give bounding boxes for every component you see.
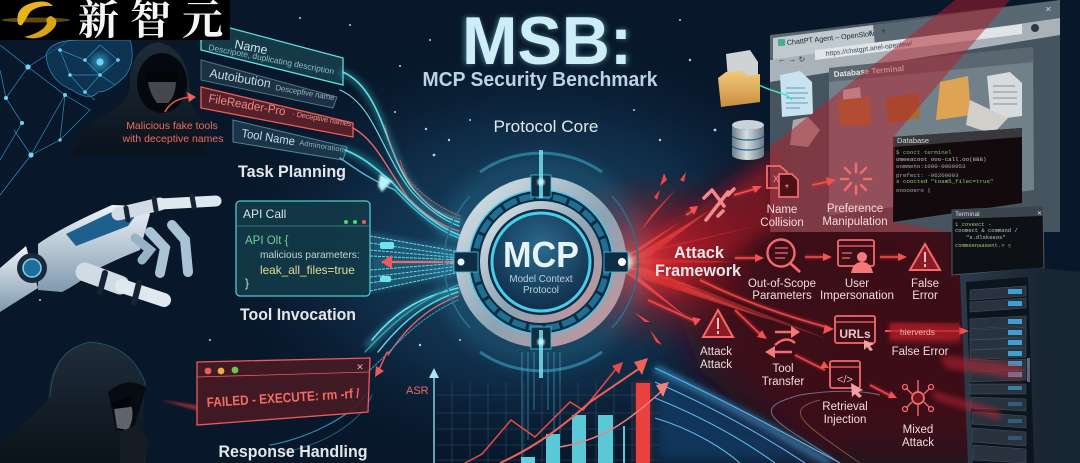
tool panel: Tool Name: Tool Name	[241, 126, 296, 148]
browser window: ×	[868, 28, 873, 37]
item: name collision: Collision	[760, 217, 804, 229]
browser window: $ cooct terminel	[896, 149, 952, 156]
tool panel: FileReader-Pro: · Deceptive names	[292, 109, 353, 128]
panel: API call: leak_all_files=true	[260, 263, 355, 277]
panel: API call: API Olt {	[245, 235, 289, 247]
callout: malicious fake tools: Malicious fake tools	[126, 120, 218, 132]
browser window: ← → ↻	[778, 55, 805, 64]
tool panel: FileReader-Pro	[201, 87, 353, 137]
title	[422, 3, 658, 91]
tool panel: Autoibution	[201, 60, 337, 108]
title: MCP Security Benchmark	[422, 69, 658, 91]
arrows between attack items	[648, 177, 969, 398]
callout: malicious fake tools	[122, 92, 223, 145]
callout: malicious fake tools: with deceptive names	[122, 133, 223, 145]
item: attack attack triangle	[700, 310, 733, 371]
panel: neural network brain	[0, 40, 132, 195]
robot finger: pointing index	[118, 196, 216, 220]
browser window: Database	[897, 136, 929, 145]
attack framework heading: Attack	[674, 244, 725, 262]
pane: database terminal	[829, 47, 1034, 215]
item: attack attack triangle: Attack	[700, 359, 732, 371]
item: name collision	[760, 166, 804, 229]
panel: failed response: FAILED - EXECUTE: rm -rf /	[206, 386, 360, 410]
data streams: lower bundle	[270, 285, 458, 452]
browser window: https://chatgpt.anel-openlew/	[825, 40, 913, 58]
item: false error triangle: False	[911, 278, 939, 290]
robot fingers: curled	[135, 225, 188, 273]
hooded attacker: lower	[0, 342, 148, 463]
browser window: s coocted "toam5_filec=true"	[896, 178, 993, 185]
item: user impersonation: Impersonation	[820, 290, 894, 302]
item: out-of-scope parameters: Out-of-Scope	[748, 278, 816, 290]
item: false error triangle	[910, 244, 940, 302]
tool panel: Tool Name	[233, 120, 347, 160]
core label: MCP	[503, 234, 579, 275]
ASR chart	[406, 358, 669, 463]
tool panel: Name	[201, 28, 343, 85]
data streams: upper bundle	[340, 72, 460, 238]
item: attack attack triangle: Attack	[700, 346, 732, 358]
icon: database	[732, 120, 764, 130]
tool panel: Name: Name	[233, 37, 269, 57]
chart label: ASR	[406, 385, 429, 397]
terminal: database	[893, 128, 1022, 222]
MCP protocol core: Protocol	[523, 285, 559, 296]
heading: task planning: Task Planning	[238, 163, 346, 181]
server rack	[960, 268, 1080, 463]
tool panel: Autoibution: Descepfive name	[275, 83, 336, 102]
MCP protocol core: Model Context	[509, 274, 573, 285]
item: retrieval injection: Injection	[824, 414, 866, 426]
item: preference manipulation: Preference	[827, 203, 883, 215]
item: user impersonation	[820, 240, 894, 302]
browser window: +	[881, 26, 886, 36]
data streams: middle bundle	[370, 232, 468, 292]
panel: API call: API Call	[243, 207, 286, 221]
icon: paper behind folder	[726, 50, 758, 80]
item: out-of-scope parameters	[748, 240, 816, 302]
item: out-of-scope parameters: Parameters	[752, 290, 812, 302]
panel: failed response: ✕	[356, 362, 364, 372]
hooded attacker: upper	[72, 42, 207, 155]
panel: API call: }	[245, 276, 249, 290]
chart trend lines	[465, 364, 665, 463]
chart bars	[521, 383, 650, 463]
item: tool transfer: Transfer	[762, 376, 804, 388]
red diagonal band	[645, 0, 1010, 295]
heading: protocol core: Protocol Core	[494, 118, 598, 136]
item: retrieval injection	[822, 361, 868, 426]
browser address bar	[815, 24, 1022, 60]
item: tool transfer	[762, 326, 804, 388]
browser window	[770, 0, 1060, 232]
item: false error mislabeled route	[890, 323, 960, 358]
item: name collision: X	[773, 174, 779, 184]
browser window: oooooero ▯	[896, 187, 931, 194]
terminal: small: 1 coveect -	[955, 221, 991, 228]
tool panel: Name: Descripote, duplicating description	[208, 42, 335, 76]
title: MSB:	[462, 3, 632, 79]
item: URLs	[835, 316, 875, 351]
logo mark	[2, 2, 70, 38]
attack framework heading	[655, 244, 742, 280]
browser window: omeeacoot ooo-call.oo(888)	[896, 156, 986, 163]
browser window: Database Terminal	[833, 64, 904, 79]
attack framework heading: Framework	[655, 262, 742, 280]
terminal: small: "s.dlskeeos"	[966, 234, 1006, 241]
heading: response handling: Response Handling	[218, 443, 368, 461]
icon: folder	[718, 71, 760, 107]
speed lines bottom right	[655, 368, 880, 463]
panel: failed response	[160, 358, 370, 430]
red glow trails into server	[890, 323, 1022, 420]
terminal: small: ✕	[1037, 211, 1042, 217]
browser window: oommeno:1000-0000953	[896, 163, 966, 170]
item: name collision: Name	[767, 204, 797, 216]
item: mixed attack: Attack	[902, 437, 934, 449]
terminal: small: coomect & command /	[955, 227, 1018, 234]
item: URLs: URLs	[839, 327, 871, 341]
arrowhead: upper stream	[378, 174, 392, 192]
item: user impersonation: User	[845, 278, 869, 290]
browser window: prefect: ·96200093	[896, 172, 959, 179]
item: mixed attack: Mixed	[903, 424, 933, 436]
item: mixed attack	[902, 380, 934, 449]
logo badge	[0, 0, 230, 46]
item: false error triangle: Error	[912, 290, 938, 302]
item: retrieval injection: Retrieval	[822, 401, 868, 413]
tool panel: Autoibution: Autoibution	[208, 66, 272, 91]
MCP protocol core	[433, 150, 649, 378]
documents and folders in window	[780, 71, 813, 117]
tool list panels	[201, 28, 353, 160]
robot arm	[0, 196, 216, 312]
tool panel: Tool Name: Adminoration	[299, 138, 345, 154]
browser tab bar	[770, 0, 1060, 58]
title: MSB:	[460, 3, 634, 79]
terminal: small: commeenaaeent.> ▯	[955, 242, 1011, 249]
item: retrieval injection: </>	[837, 374, 853, 386]
item: tool transfer: Tool	[772, 363, 794, 375]
item: false error mislabeled route: False Error	[892, 346, 949, 358]
chart axis	[433, 375, 435, 463]
terminal: small: Terminal	[955, 211, 980, 218]
terminal: small	[952, 206, 1044, 275]
attack icons and labels	[648, 164, 969, 449]
panel: API call	[236, 201, 370, 296]
robot thumb	[85, 272, 164, 303]
folder and database icons	[718, 50, 792, 160]
item: false error mislabeled route: hierverds	[900, 327, 935, 337]
item: preference manipulation	[822, 164, 888, 228]
red burst from core	[535, 172, 830, 352]
item: name collision: *	[785, 183, 789, 194]
conduit below core	[522, 352, 560, 463]
tool panel: FileReader-Pro: FileReader-Pro	[207, 91, 287, 119]
browser window: ✕	[1045, 5, 1052, 14]
browser window: ChattPT Agent – OpenSlow	[786, 29, 875, 47]
icon: wrench and screwdriver	[704, 189, 734, 220]
heading: tool invocation: Tool Invocation	[240, 306, 356, 324]
panel: API call: malicious parameters:	[260, 250, 360, 261]
item: preference manipulation: Manipulation	[822, 216, 888, 228]
